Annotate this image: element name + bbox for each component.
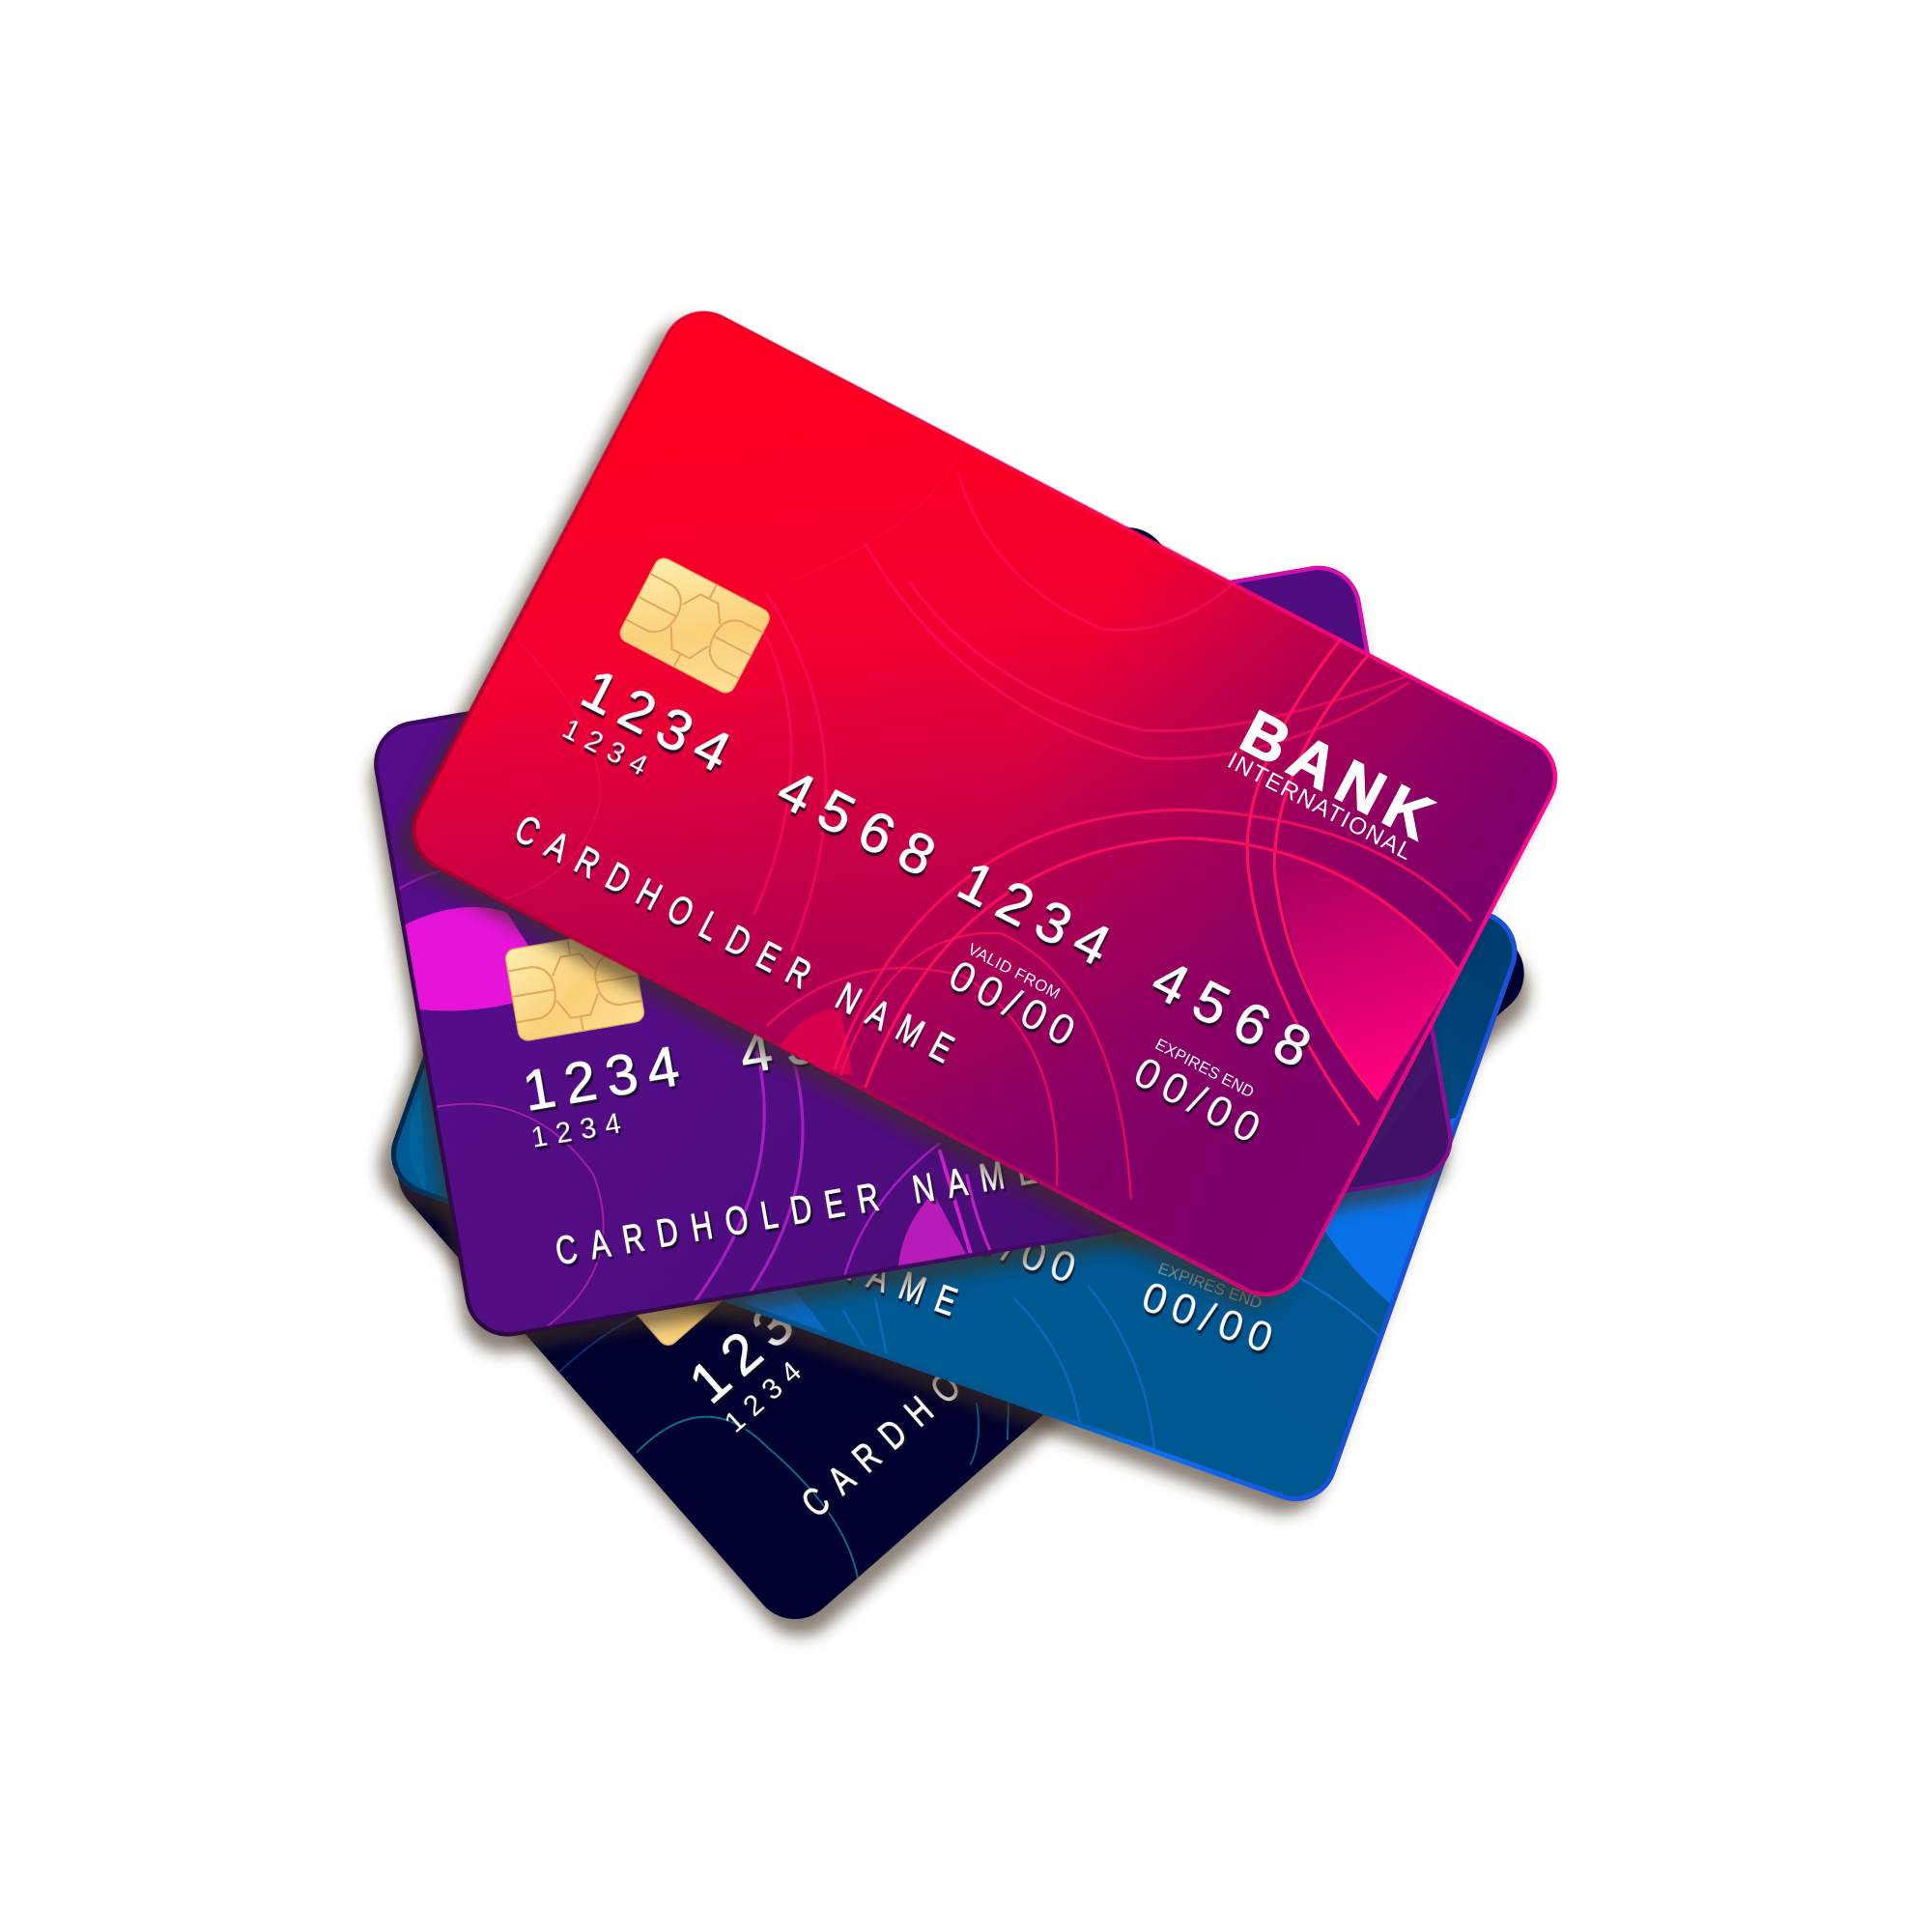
card numbers and name: [518, 978, 1040, 1274]
cardholder name: CARDHOLDER NAME: [508, 806, 961, 1071]
chip: [504, 929, 645, 1042]
card numbers and name: [678, 1043, 1188, 1529]
bank logo: BANK: [1230, 696, 1444, 853]
card numbers: [557, 657, 1321, 1108]
red card magenta overlay: [398, 297, 1571, 1310]
valid from: VALID FROM: [965, 940, 1064, 1003]
card numbers: 4568: [1142, 948, 1321, 1080]
card numbers and name: 1234: [678, 1264, 838, 1415]
purple card contents: [499, 868, 1040, 1274]
card: navy: [381, 510, 1542, 1636]
chip: [617, 554, 773, 696]
purple card edge: [370, 561, 1457, 1341]
card numbers: 1234: [557, 713, 652, 782]
red card contents: [503, 416, 1444, 1218]
card numbers and labels: 00/00: [939, 1204, 1082, 1293]
card numbers and labels: 00/00: [1136, 1273, 1278, 1362]
card numbers: 4568: [768, 757, 945, 889]
valid from: 00/00: [941, 952, 1082, 1056]
card numbers and name: 1234: [719, 1355, 808, 1439]
card numbers and labels: [488, 960, 1311, 1428]
red card edge: [400, 298, 1570, 1309]
card: purple: [368, 560, 1459, 1342]
card numbers and name: 1234: [518, 1035, 684, 1123]
expires end: 00/00: [1126, 1049, 1267, 1152]
blue card edge: [383, 596, 1525, 1510]
card numbers and name: 1234: [528, 1107, 623, 1154]
blue card contents: [488, 960, 1311, 1428]
card numbers: 1234: [572, 657, 740, 784]
card numbers and name: 4568: [735, 996, 910, 1086]
card: blue: [368, 914, 1518, 1524]
card numbers and labels: 4568: [741, 1032, 920, 1147]
card numbers and name: CARDHOLDER NAME: [793, 1170, 1188, 1525]
card: red: [398, 297, 1571, 1310]
expires end: EXPIRES END: [1152, 1035, 1257, 1101]
red card circle pattern: [495, 457, 1471, 1199]
purple card shapes: [399, 869, 991, 1326]
card numbers and labels: CARDHOLDER NAME: [488, 1120, 963, 1324]
expires label: EXPIRES END: [1155, 1259, 1264, 1313]
bank logo: INTERNATIONAL: [1223, 748, 1416, 866]
blue card shapes: [410, 1094, 1533, 1464]
card numbers: 1234: [949, 849, 1120, 979]
navy card arcs: [556, 1313, 1009, 1588]
navy card contents: [603, 957, 1188, 1529]
card numbers and name: CARDHOLDER NAME: [552, 1147, 1040, 1273]
chip: [606, 1195, 763, 1349]
